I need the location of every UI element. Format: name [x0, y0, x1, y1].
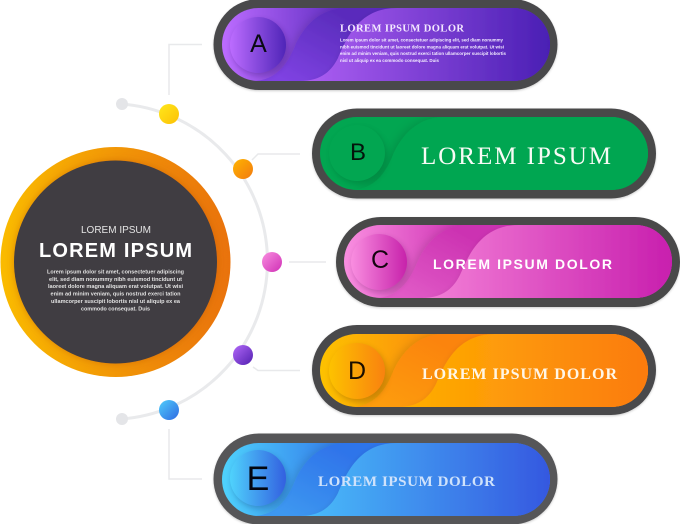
circle body text: Lorem ipsum dolor sit amet, consectetuer adipiscing	[47, 270, 185, 276]
marker dot D	[233, 345, 253, 365]
marker dot E	[159, 400, 179, 420]
A heading: LOREM IPSUM DOLOR	[340, 24, 464, 35]
letter A: A	[250, 30, 267, 58]
A body text	[340, 38, 506, 64]
marker dot C	[262, 252, 282, 272]
A body text: nisl ut aliquip ex ea commodo consequat. Duis	[340, 58, 439, 64]
circle main heading: LOREM IPSUM	[39, 240, 192, 262]
marker dot A	[159, 104, 179, 124]
panel: C	[336, 217, 680, 307]
circle body text: enim ad minim veniam, quis nostrud exerci tation	[50, 292, 181, 298]
circle small heading: LOREM IPSUM	[81, 225, 151, 236]
letter E: E	[247, 460, 269, 498]
circle body text: commodo consequat. Duis	[81, 306, 150, 312]
A body text: enim ad minim veniam, quis nostrud exerci tation ullamcorper suscipit lobortis	[340, 51, 506, 57]
A body text: nibh euismod tincidunt ut laoreet dolore magna aliquam erat volutpat. Ut wisi	[340, 45, 504, 51]
circle body text: elit, sed diam nonummy nibh euismod tincidunt ut	[49, 277, 182, 283]
E heading: LOREM IPSUM DOLOR	[318, 474, 495, 490]
letter C: C	[371, 246, 389, 274]
panel: E	[214, 434, 558, 524]
marker dot B	[233, 159, 253, 179]
D heading: LOREM IPSUM DOLOR	[422, 366, 617, 383]
letter B: B	[350, 139, 366, 166]
letter D: D	[348, 357, 366, 385]
C heading: LOREM IPSUM DOLOR	[433, 256, 612, 272]
panel: B	[312, 108, 656, 198]
central circle panel	[0, 147, 230, 377]
panel: A	[214, 0, 558, 90]
A body text: Lorem ipsum dolor sit amet, consectetuer adipiscing elit, sed diam nonummy	[340, 38, 503, 44]
connector lines	[169, 44, 326, 479]
circle body text	[47, 270, 185, 312]
circle body text: ullamcorper suscipit lobortis nisl ut aliquip ex ea	[51, 299, 181, 305]
panel: D	[312, 325, 656, 415]
curved timeline arc	[116, 98, 267, 425]
circle body text: laoreet dolore magna aliquam erat volutpat. Ut wisi	[48, 284, 183, 290]
B heading: LOREM IPSUM	[421, 143, 611, 170]
